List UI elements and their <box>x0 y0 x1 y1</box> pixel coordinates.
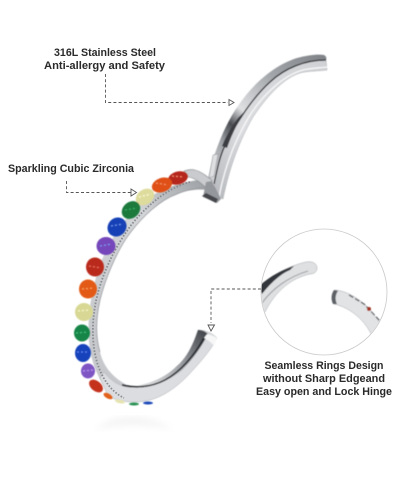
label: seamless rings design <box>256 360 392 398</box>
ring reflection <box>96 416 172 430</box>
detail: upper ring end <box>255 262 317 312</box>
label: seamless rings design: without Sharp Edgeand <box>262 373 385 385</box>
zirconia gem row <box>74 169 189 406</box>
pave stone edging <box>93 182 190 398</box>
label: 316L stainless steel: Anti-allergy and Safety <box>44 60 166 72</box>
callout arrow: zirconia <box>66 181 136 196</box>
callout arrow: steel <box>106 74 234 106</box>
ring tail end <box>100 330 217 402</box>
infographic canvas <box>8 48 392 423</box>
gem facets <box>76 176 184 371</box>
callout arrow: seamless ends <box>208 289 261 331</box>
label: seamless rings design: Seamless Rings Design <box>264 360 384 372</box>
label: seamless rings design: Easy open and Lock Hinge <box>256 386 392 398</box>
hinge <box>184 154 221 203</box>
label: 316L stainless steel <box>44 47 166 72</box>
lower ring band <box>88 179 208 400</box>
upper hinged steel arc <box>207 55 327 199</box>
label: 316L stainless steel: 316L Stainless Steel <box>54 47 156 59</box>
magnified detail circle <box>255 229 387 355</box>
label: sparkling cubic zirconia: Sparkling Cubic Zirconia <box>8 163 135 175</box>
detail: lower ring end with gems <box>330 289 380 334</box>
